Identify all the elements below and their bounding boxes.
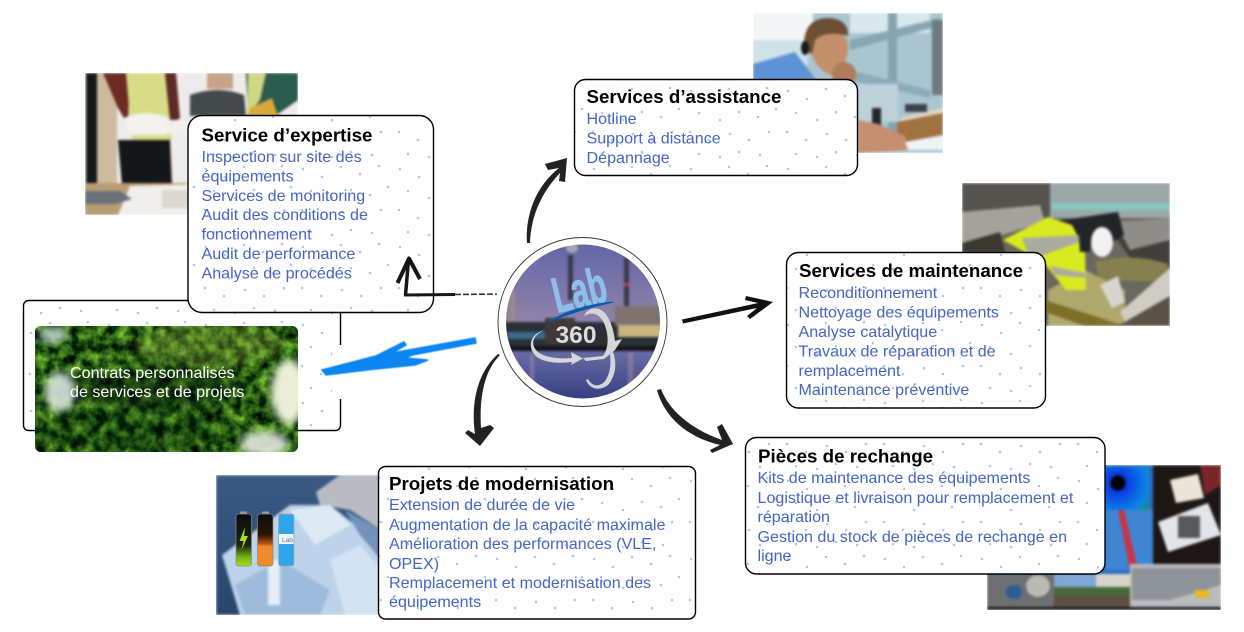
icon: blue battery (278, 512, 294, 566)
contract text: de services et de projets (70, 383, 244, 401)
list: Extension de durée de vie (389, 496, 575, 514)
arrow: to service d'expertise (398, 258, 497, 295)
card (786, 252, 1046, 408)
list (758, 469, 1074, 565)
photo collage: spare parts (987, 465, 1221, 610)
card (378, 466, 696, 619)
list (389, 496, 665, 611)
photo: hotline operator (753, 13, 943, 153)
card (746, 438, 1105, 574)
list: Nettoyage des équipements (798, 304, 999, 322)
panel: services d'assistance (574, 13, 943, 176)
heading: Pièces de rechange (758, 446, 933, 466)
outer ring (498, 238, 667, 406)
blue swoosh (548, 302, 613, 322)
list: Support à distance (586, 130, 721, 148)
list: Services de monitoring (202, 187, 365, 205)
panel: service d'expertise (85, 73, 434, 312)
list: Maintenance préventive (798, 381, 969, 399)
list: Augmentation de la capacité maximale (389, 516, 665, 534)
list: Travaux de réparation et de (798, 342, 996, 360)
heading: Services d’assistance (586, 86, 781, 107)
list (586, 110, 721, 167)
list (202, 148, 368, 282)
arrow: to services de maintenance (682, 296, 773, 324)
illustration: plant with batteries (216, 475, 381, 615)
list: réparation (758, 508, 830, 526)
panel: services de maintenance (786, 183, 1170, 408)
list: Logistique et livraison pour remplacement et (758, 489, 1074, 507)
list: remplacement (798, 362, 901, 380)
card (188, 116, 434, 312)
panel: contrats personnalisés (24, 300, 346, 457)
list: Analyse catalytique (798, 323, 937, 341)
list: Kits de maintenance des équipements (758, 469, 1030, 487)
list: Audit de performance (202, 245, 355, 263)
list: équipements (202, 167, 294, 185)
arrow: to projets de modernisation (465, 354, 500, 446)
list: Amélioration des performances (VLE, (389, 535, 656, 553)
list: Remplacement et modernisation des (389, 574, 651, 592)
list: Reconditionnement (798, 284, 938, 302)
heading: Service d’expertise (202, 124, 372, 146)
list: Dépannage (586, 149, 670, 167)
list: Hotline (586, 110, 637, 128)
panel: pièces de rechange (746, 438, 1221, 610)
list: fonctionnement (202, 226, 312, 244)
arrow: to pièces de rechange (657, 389, 733, 453)
contract text (70, 364, 244, 401)
arrow: to services d'assistance (527, 158, 567, 243)
plant photo (505, 243, 661, 402)
360 label: 360 (556, 322, 596, 349)
list: Inspection sur site des (202, 148, 362, 166)
heading: Projets de modernisation (389, 473, 614, 494)
Lab wordmark: Lab (546, 257, 612, 324)
photo: construction workers (85, 73, 298, 215)
list: OPEX) (389, 555, 439, 573)
list: Gestion du stock de pièces de rechange en (758, 528, 1067, 546)
list (798, 284, 999, 399)
list: équipements (389, 593, 481, 611)
forest photo card (35, 323, 307, 457)
list: ligne (758, 547, 792, 565)
contract outline box (24, 300, 340, 430)
arrow: blue brush to contrats (322, 338, 476, 375)
list: Analyse de procédés (202, 264, 352, 282)
blue arrow gap in box border (332, 345, 346, 399)
photo: worker in yellow vest (962, 183, 1170, 326)
circular arrows (531, 308, 622, 389)
icon: orange battery (258, 512, 273, 566)
icon: green battery (236, 512, 252, 566)
list: Audit des conditions de (202, 206, 368, 224)
icon: blue battery: Lab (282, 537, 293, 544)
card (574, 80, 858, 176)
panel: projets de modernisation (216, 466, 696, 619)
central Lab 360 logo (498, 238, 667, 406)
heading: Services de maintenance (799, 260, 1023, 281)
contract text: Contrats personnalisés (70, 364, 235, 382)
